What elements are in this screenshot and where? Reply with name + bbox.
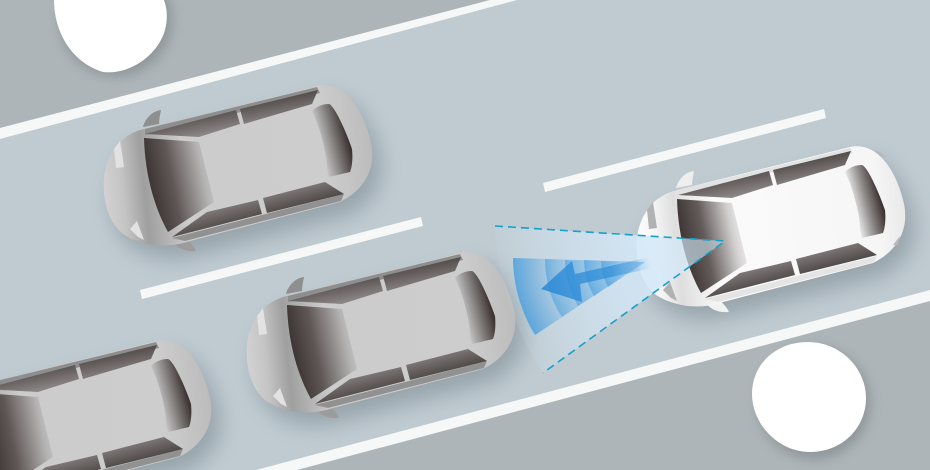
upper pavement (0, 0, 492, 128)
sensor range dashed lines (495, 226, 725, 373)
radar wave bands (513, 258, 645, 335)
lower pavement (290, 298, 930, 470)
car: grey car far lane (104, 85, 381, 258)
sensor detection fan (495, 226, 725, 373)
lower kerb line (256, 290, 930, 470)
car: grey car bottom left (0, 340, 220, 470)
car: grey car ahead in lane (247, 252, 524, 425)
arrow: forward detection (541, 257, 652, 302)
upper kerb line (0, 0, 517, 139)
lane dash left (140, 217, 423, 299)
lane dash right (543, 109, 826, 192)
lower roadside tree (752, 342, 870, 459)
car: white car with sensor (637, 146, 914, 319)
upper roadside tree (54, 0, 172, 76)
